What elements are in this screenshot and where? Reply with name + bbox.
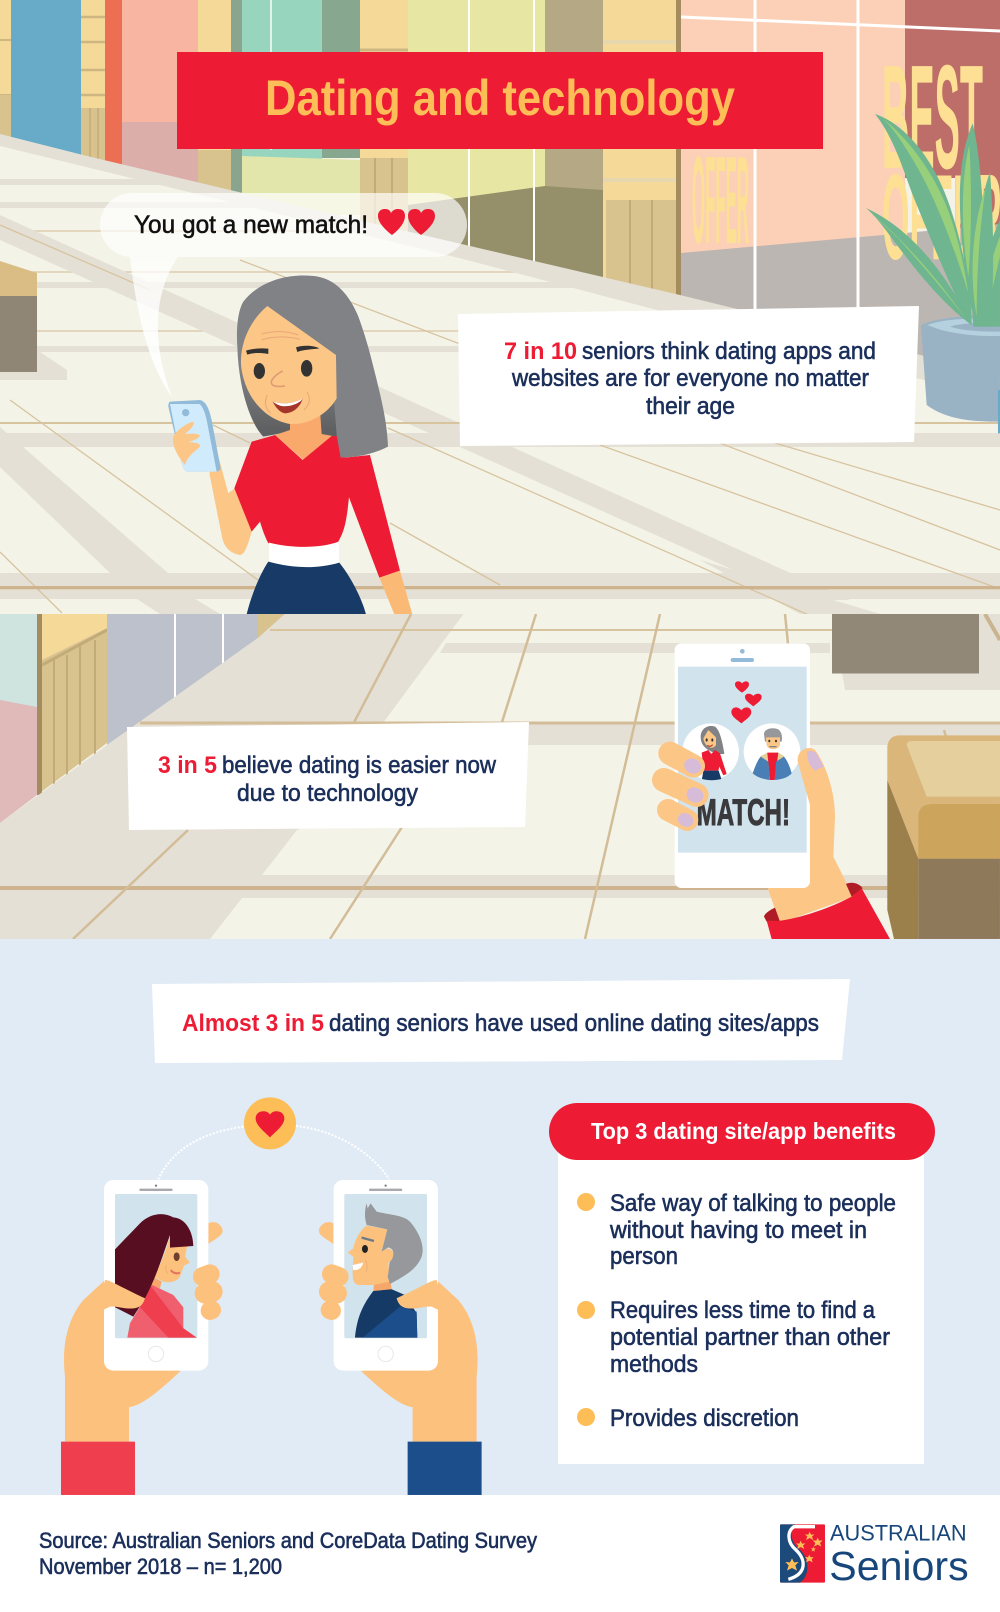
right hand and phone bbox=[319, 1180, 478, 1442]
hand holding match phone: MATCH! bbox=[697, 791, 790, 833]
fingers bbox=[664, 753, 697, 820]
cuff bbox=[764, 908, 780, 922]
blue cuff bbox=[408, 1442, 482, 1495]
plant in pot bbox=[866, 114, 1000, 433]
illustration: two phones connected by heart bbox=[61, 1097, 482, 1495]
stat box: almost 3 in 5 bbox=[152, 979, 850, 1063]
senior woman holding phone bbox=[168, 275, 412, 614]
panel: second mall scene bbox=[0, 612, 1000, 942]
left hand and phone bbox=[64, 1180, 223, 1442]
red cuff bbox=[61, 1442, 135, 1495]
stat box: 7 in 10: their age bbox=[646, 393, 735, 420]
benefit 1: person bbox=[610, 1243, 678, 1270]
benefit 2: Requires less time to find a bbox=[610, 1297, 875, 1324]
bench bbox=[887, 735, 1000, 939]
stat box: 7 in 10: 7 in 10 bbox=[504, 338, 577, 365]
title banner: Dating and technology bbox=[265, 70, 735, 126]
benefit 1: Safe way of talking to people bbox=[610, 1190, 896, 1217]
panel: footer source: Source: Australian Seniors and CoreData Dating Survey bbox=[39, 1528, 537, 1553]
benefit 2: potential partner than other bbox=[610, 1324, 890, 1351]
speech bubble: new match bbox=[100, 193, 467, 397]
stat box: 7 in 10 bbox=[458, 306, 919, 446]
benefit 2 bbox=[577, 1297, 890, 1378]
hand holding match phone bbox=[664, 643, 890, 939]
panel: mall scene with storefronts bbox=[0, 0, 1000, 614]
logo: Australian Seniors: AUSTRALIAN bbox=[830, 1521, 967, 1546]
benefits header pill bbox=[549, 1103, 935, 1160]
benefits header pill: Top 3 dating site/app benefits bbox=[591, 1118, 896, 1144]
panel: blue survey section bbox=[0, 939, 1000, 1495]
mini man bbox=[753, 728, 792, 780]
panel: top 3 benefits bbox=[549, 1103, 935, 1464]
stat box: 3 in 5: 3 in 5 bbox=[158, 752, 217, 779]
benefit 3: Provides discretion bbox=[610, 1405, 799, 1432]
stat box: almost 3 in 5: Almost 3 in 5 bbox=[182, 1010, 324, 1037]
benefit 2: methods bbox=[610, 1351, 698, 1378]
woman profile bbox=[115, 1214, 197, 1338]
speech bubble: new match: You got a new match! bbox=[134, 211, 368, 239]
benefit 1: without having to meet in bbox=[609, 1217, 867, 1244]
title banner bbox=[177, 52, 823, 149]
stat box: 3 in 5 bbox=[127, 722, 529, 830]
stat box: 3 in 5: believe dating is easier now bbox=[222, 752, 496, 779]
man profile bbox=[348, 1203, 423, 1338]
thumb bbox=[798, 748, 835, 858]
mini woman bbox=[701, 726, 727, 780]
stat box: almost 3 in 5: dating seniors have used online dating sites/apps bbox=[329, 1010, 819, 1037]
hearts on phone bbox=[731, 681, 762, 723]
panel: footer source bbox=[0, 1495, 1000, 1612]
panel: footer source: November 2018 – n= 1,200 bbox=[39, 1554, 282, 1579]
floor tiles bbox=[0, 146, 1000, 614]
benefit 1 bbox=[577, 1190, 896, 1270]
stat box: 7 in 10: seniors think dating apps and bbox=[582, 338, 876, 365]
logo: Australian Seniors bbox=[780, 1521, 969, 1589]
stat box: 7 in 10: websites are for everyone no matter bbox=[511, 365, 869, 392]
icon: heart badge bbox=[244, 1097, 296, 1149]
logo: Australian Seniors: Seniors bbox=[829, 1543, 969, 1589]
stat box: 3 in 5: due to technology bbox=[237, 780, 419, 807]
